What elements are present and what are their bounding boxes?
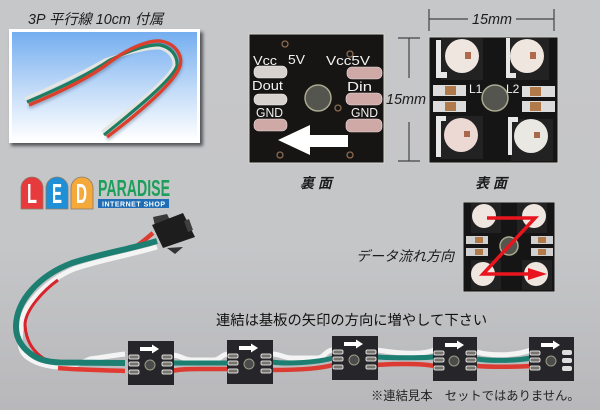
logo letter E: E	[52, 178, 62, 209]
board: back side	[249, 34, 384, 163]
LED bottom left	[436, 116, 483, 159]
board: front side	[429, 37, 558, 163]
logo letter D: D	[76, 178, 87, 209]
caption: data flow: データ流れ方向	[356, 248, 456, 264]
logo letter L: L	[27, 178, 37, 209]
module 4	[433, 337, 477, 381]
mounting hole	[305, 85, 331, 111]
logo wordmark: PARADISE	[98, 175, 170, 201]
dimension: height	[386, 38, 426, 161]
logo	[21, 175, 170, 209]
logo tagline	[98, 199, 169, 208]
silk labels: GND	[256, 105, 283, 120]
board: front side: L2	[506, 82, 520, 96]
arrow	[278, 125, 348, 155]
resistors	[433, 85, 555, 112]
module 3	[332, 336, 378, 380]
note: sample only: ※連結見本 セットではありません。	[371, 389, 580, 403]
LED top left	[436, 38, 483, 80]
panel: cable photo	[9, 29, 203, 146]
silk labels: GND	[351, 105, 378, 120]
silk labels: Vcc	[253, 53, 278, 68]
silk labels: Dout	[252, 78, 283, 93]
LED bottom right	[508, 117, 553, 161]
dimension: width	[429, 9, 554, 31]
silk labels: 5V	[288, 52, 305, 67]
silk labels: Vcc5V	[326, 53, 370, 68]
note: connection direction: 連結は基板の矢印の方向に増やして下さい	[216, 312, 487, 329]
logo letter L	[21, 177, 43, 209]
wires between modules	[172, 350, 531, 371]
connector	[152, 213, 195, 254]
logo tagline: INTERNET SHOP	[102, 201, 165, 208]
caption: cable: 3P 平行線 10cm 付属	[28, 11, 165, 28]
cable assembly	[16, 213, 574, 385]
silk labels	[252, 52, 378, 120]
LED top right	[506, 38, 549, 80]
logo letter D	[71, 177, 93, 209]
caption: front side: 表 面	[475, 175, 510, 191]
connector wires	[16, 233, 157, 371]
caption: back side: 裏 面	[300, 175, 335, 191]
silk labels: Din	[347, 79, 372, 94]
center hole	[482, 85, 508, 111]
module 2	[227, 340, 273, 384]
cable	[25, 41, 181, 139]
module 1	[128, 341, 174, 385]
board: data flow	[463, 202, 555, 292]
data flow arrow	[483, 218, 547, 280]
dimension: width: 15mm	[472, 12, 512, 28]
solder pads	[254, 66, 382, 132]
silk L1 L2: L1	[469, 82, 483, 96]
dimension: height: 15mm	[386, 92, 426, 108]
logo letter E	[46, 177, 68, 209]
module 5	[529, 337, 574, 381]
vias	[277, 41, 353, 158]
